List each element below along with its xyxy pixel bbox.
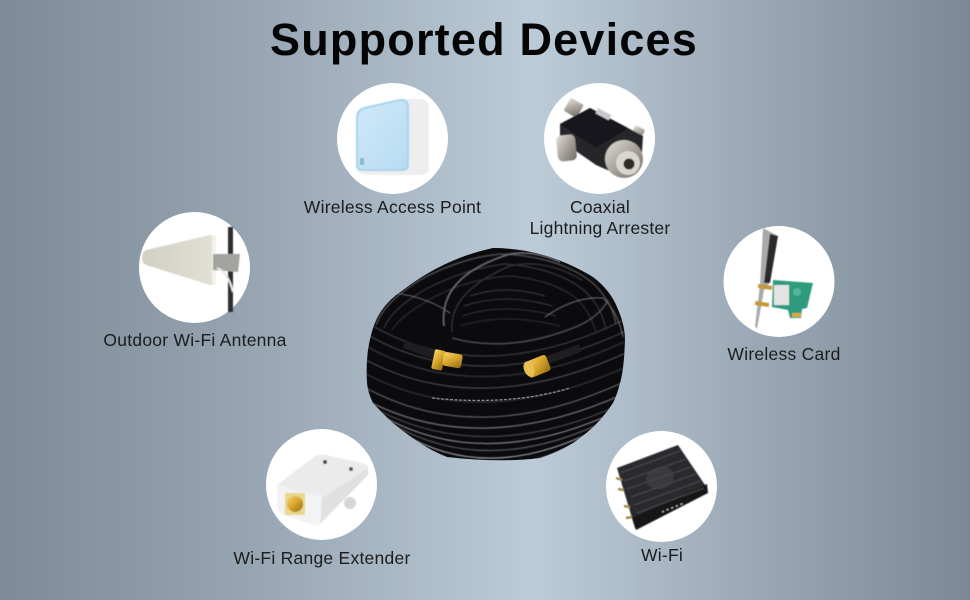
title: Supported Devices bbox=[270, 14, 698, 65]
icon: wi-fi modem bbox=[616, 445, 708, 530]
central cable coil bbox=[366, 248, 628, 470]
icon circle: extender bbox=[266, 429, 377, 540]
connector: left gold sma bbox=[404, 344, 463, 371]
connector: right gold sma bbox=[521, 348, 580, 378]
label: outdoor wi-fi antenna: Outdoor Wi-Fi Antenna bbox=[103, 330, 287, 350]
icon: pcie card bbox=[755, 228, 813, 329]
device: wi-fi range extender bbox=[233, 429, 411, 568]
icon: extender box bbox=[277, 455, 368, 525]
label: coaxial lightning arrester: Coaxial bbox=[570, 197, 630, 217]
icon circle: arrester bbox=[544, 83, 655, 194]
cable print bbox=[432, 388, 570, 400]
label: wireless card: Wireless Card bbox=[727, 344, 841, 364]
device: wi-fi bbox=[606, 431, 717, 565]
device: wireless access point bbox=[304, 83, 481, 217]
icon: router body bbox=[356, 99, 429, 175]
label: wi-fi range extender: Wi-Fi Range Extender bbox=[233, 548, 411, 568]
device: outdoor wi-fi antenna bbox=[103, 212, 287, 350]
label: wireless access point: Wireless Access Point bbox=[304, 197, 481, 217]
icon: antenna panel on pole bbox=[142, 227, 240, 312]
cable loops bbox=[366, 253, 628, 470]
icon: arrester body bbox=[556, 98, 645, 178]
icon circle: antenna bbox=[139, 212, 250, 323]
device: coaxial lightning arrester: Lightning Arrester bbox=[530, 218, 670, 238]
device: wireless card bbox=[724, 226, 841, 364]
icon circle: wireless card bbox=[724, 226, 834, 337]
device: coaxial lightning arrester bbox=[530, 83, 670, 238]
icon circle: wireless access point bbox=[337, 83, 448, 194]
cable coil mass bbox=[367, 248, 625, 460]
icon circle: wi-fi bbox=[606, 431, 717, 542]
label: wi-fi: Wi-Fi bbox=[641, 545, 683, 565]
